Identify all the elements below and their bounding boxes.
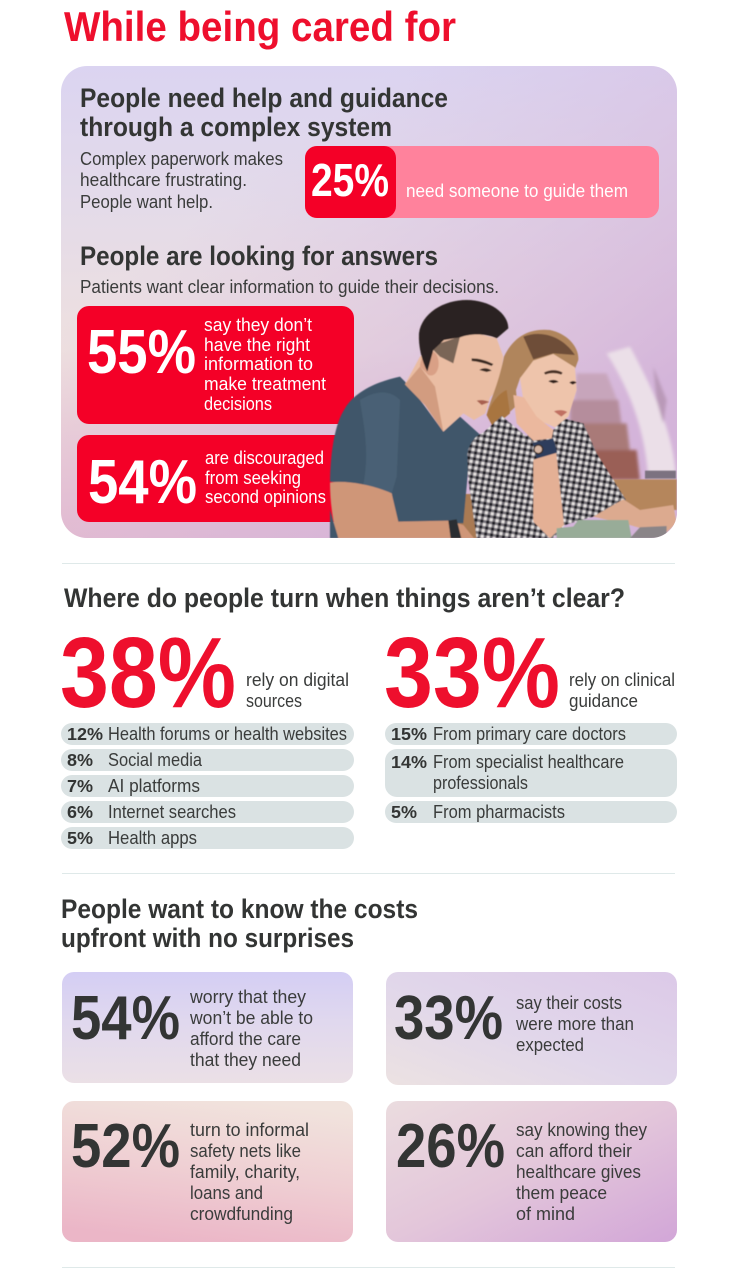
label: rely on digital sources: rely on digital [246,670,349,690]
text: complex paperwork: People want help. [80,192,213,212]
row: 6%: 6% [67,802,93,822]
stat box: 54%: second opinions [205,487,326,507]
label: rely on clinical guidance [569,670,675,711]
card: 54%: afford the care [190,1029,301,1049]
card: 52% [62,1101,353,1242]
row: 14%: From specialist healthcare [433,752,624,772]
photo: couple looking at a laptop [330,300,677,538]
panel: help and guidance [61,66,677,538]
label: rely on clinical guidance: guidance [569,691,638,711]
stat box: 54%: are discouraged [205,448,324,468]
text: patients want information: Patients want clear information to guide their decisions. [80,277,499,297]
panel background [61,66,677,538]
card: 33%: 33% [394,984,503,1053]
row: 7% [61,775,354,797]
row: 15%: From primary care doctors [433,724,626,744]
row: 14%: professionals [433,773,528,793]
card: 33%: say their costs [516,993,622,1013]
stat box: 55%: 55% [87,318,196,387]
stat box: 54%: from seeking [205,468,301,488]
row: 6% [61,801,354,823]
row: 12%: Health forums or health websites [108,724,347,744]
card: 26%: say knowing they [516,1120,647,1140]
heading: help and guidance: through a complex system [80,112,392,142]
heading: costs upfront: upfront with no surprises [61,923,354,953]
heading: where do people turn: Where do people turn when things aren’t clear? [64,583,625,613]
stat box: 55%: have the right [204,335,310,355]
card: 52%: crowdfunding [190,1204,293,1224]
row: 12%: 12% [67,724,103,744]
card: 52%: safety nets like [190,1141,301,1161]
row: 5% pharmacists [385,801,677,823]
card: 54%: that they need [190,1050,301,1070]
text: complex paperwork: Complex paperwork makes [80,149,283,169]
big stat: 38%: 38% [60,617,236,729]
card: 26% [386,1101,677,1242]
row: 15% [385,723,677,745]
row: 8% [61,749,354,771]
card: 52%: 52% [71,1112,180,1181]
label: rely on digital sources: sources [246,691,302,711]
row: 14%: 14% [391,752,427,772]
woman [486,329,579,415]
row: 5%: Health apps [108,828,197,848]
card: 54%: won’t be able to [189,1008,313,1028]
heading: help and guidance: People need help and guidance [80,83,448,113]
row: 15%: 15% [391,724,427,744]
divider [62,873,675,874]
text: complex paperwork [80,149,283,212]
card: 52%: family, charity, [190,1162,300,1182]
stat box: 55%: make treatment [204,374,326,394]
card: 26%: them peace [516,1183,607,1203]
text: complex paperwork: healthcare frustrating. [80,170,247,190]
card: 26%: healthcare gives [516,1162,641,1182]
card: 33%: were more than [515,1014,634,1034]
stat box: 55%: decisions [204,394,272,414]
stat box: 54%: 54% [88,448,197,517]
stat box: 55%: say they don’t [204,315,312,335]
row: 6%: Internet searches [108,802,236,822]
card: 26%: can afford their [516,1141,632,1161]
row: 5%: 5% [67,828,93,848]
card: 52%: turn to informal [190,1120,309,1140]
divider [62,563,675,564]
row: 5% pharmacists: From pharmacists [433,802,565,822]
card: 26%: 26% [396,1112,505,1181]
stat bar: 25% [305,146,659,218]
stat box: 55%: information to [204,354,313,374]
row: 14% [385,749,677,797]
card: 33%: expected [516,1035,584,1055]
row: 7%: 7% [67,776,93,796]
label: rely on clinical guidance: rely on clinical [569,670,675,690]
label: rely on digital sources [246,670,349,711]
stat bar: 25%: 25% [311,154,389,206]
stat bar: 25%: need someone to guide them [406,181,628,201]
row: 5% [61,827,354,849]
card: 54%: worry that they [189,987,306,1007]
stat box: 54% [77,435,347,522]
column: clinical guidance [384,617,677,823]
heading: help and guidance [80,83,448,142]
card: 33% [386,972,677,1085]
divider [62,1267,675,1268]
big stat: 33%: 33% [384,617,560,729]
row: 7%: AI platforms [108,776,200,796]
heading: looking for answers: People are looking for answers [80,241,438,271]
heading: costs upfront: People want to know the costs [61,894,418,924]
card: 52%: loans and [190,1183,263,1203]
row: 5% pharmacists: 5% [391,802,417,822]
card: 54%: 54% [71,984,180,1053]
card: 26%: of mind [516,1204,575,1224]
row: 8%: Social media [108,750,203,770]
column: digital sources [60,617,354,849]
stat box: 55% [77,306,354,424]
title: While being cared for [64,3,456,50]
heading: costs upfront [61,894,418,953]
man [330,377,479,523]
row: 8%: 8% [67,750,93,770]
card: 54% [62,972,353,1083]
